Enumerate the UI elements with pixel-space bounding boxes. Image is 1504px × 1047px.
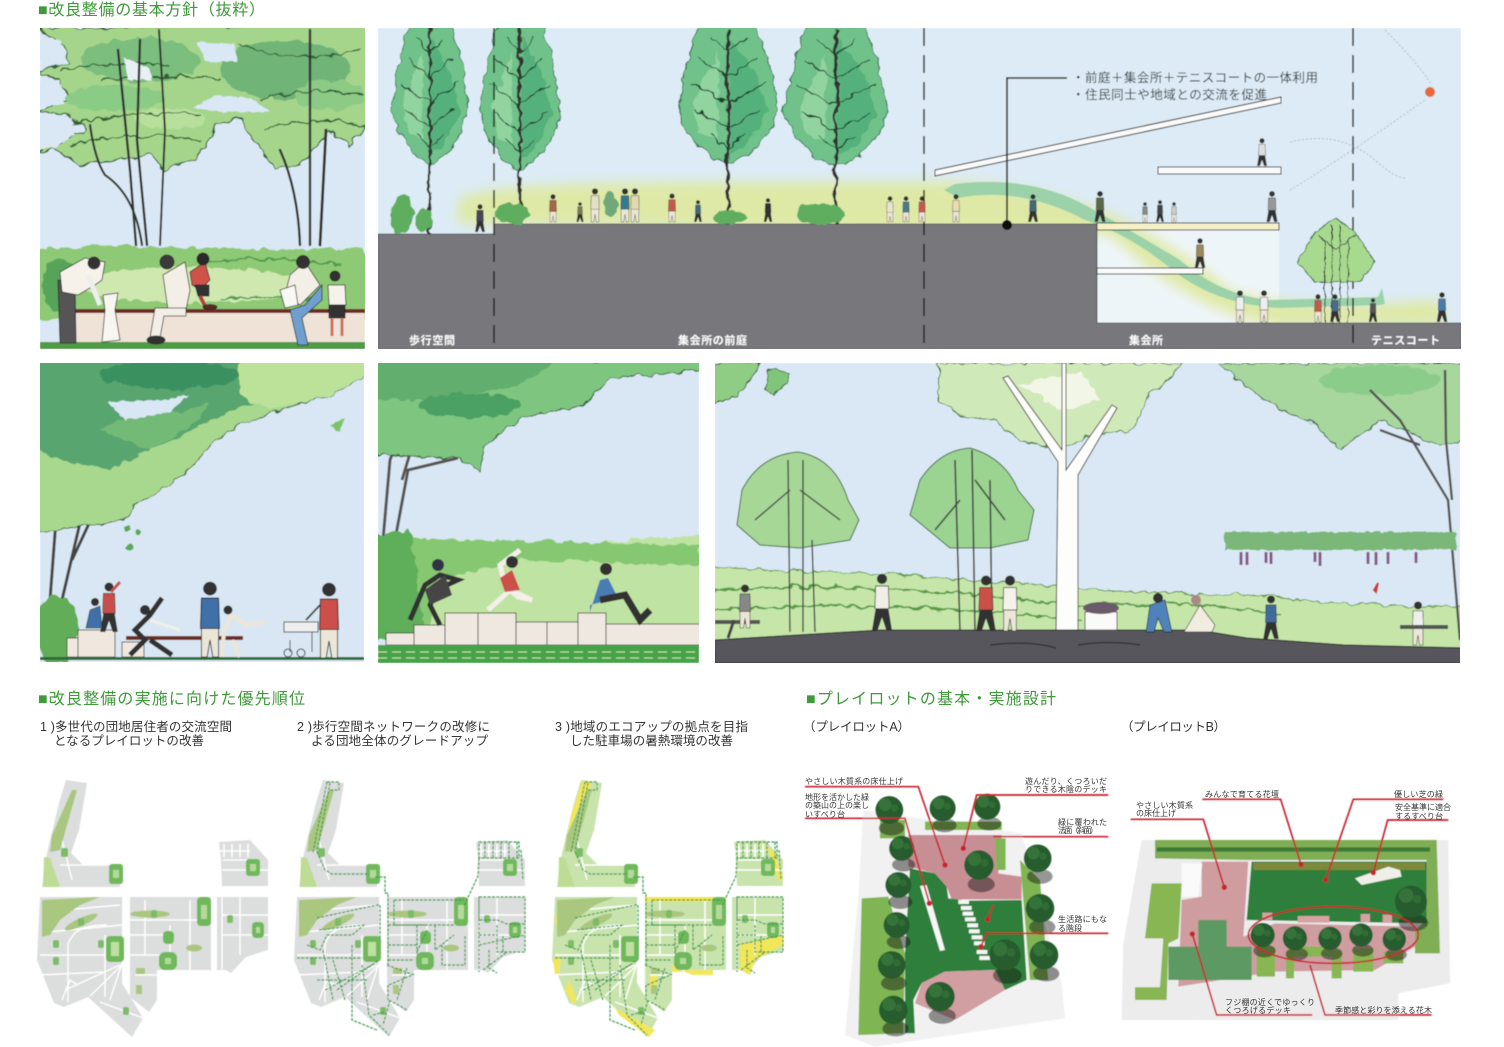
callout text [1072, 70, 1318, 102]
grass borders [858, 820, 1048, 1035]
model base [845, 810, 1065, 1047]
planter [1083, 602, 1119, 630]
heading: basic policy: ■改良整備の基本方針（抜粋） [38, 1, 265, 19]
upper foliage [711, 363, 1470, 450]
sun and light trajectory [1290, 30, 1435, 190]
zone labels: テニスコート [1371, 334, 1440, 347]
flower bed [1253, 863, 1425, 870]
zone labels [409, 333, 1440, 347]
stepping blocks [386, 613, 702, 645]
tree trunks [381, 454, 459, 537]
panel: picnic under tree sketch [35, 360, 370, 665]
panel: trees and bench sketch [36, 24, 370, 349]
foliage canopy [36, 24, 370, 170]
annotations: play lot B: 安全基準に適合 [1395, 802, 1451, 812]
large central trunk [1003, 363, 1117, 635]
annotations: play lot A [805, 776, 1107, 933]
zone labels: 歩行空間 [409, 333, 455, 347]
annotations: play lot A: いすべり台 [805, 809, 845, 819]
model base [1122, 840, 1450, 1020]
annotations: play lot B [1136, 789, 1451, 1015]
foliage canopy [374, 360, 705, 472]
priority text 1 [40, 720, 232, 748]
small tree at tennis court [1297, 218, 1375, 323]
green flow arrow [944, 182, 1385, 308]
annotations: play lot B: の床仕上げ [1136, 808, 1176, 818]
hedge [36, 245, 370, 320]
annotations: play lot A: やさしい木質系の床仕上げ [805, 776, 903, 786]
annotations: play lot A: 緑に覆われた [1058, 817, 1107, 827]
annotations: play lot A: 法面（斜面） [1058, 825, 1098, 835]
yellow-green activity glow [458, 182, 1445, 325]
annotations: play lot B: やさしい木質系 [1136, 800, 1193, 810]
annotations: play lot B: フジ棚の近くでゆっくり [1225, 997, 1315, 1007]
photo: play lot A model [805, 787, 1108, 1047]
label: play lot A: （プレイロットA） [803, 720, 910, 734]
flowering trees [1251, 886, 1428, 961]
sky gaps in canopy [36, 40, 270, 148]
priority text 3: した駐車場の暑熱環境の改善 [570, 733, 733, 748]
zone labels: 集会所の前庭 [678, 333, 747, 347]
priority text 1: となるプレイロットの改善 [54, 733, 204, 748]
annotations: play lot B: 季節感と彩りを添える花木 [1335, 1005, 1432, 1015]
ground section [378, 224, 1461, 349]
panel: cross-section of the meeting hall and forecourt [378, 21, 1461, 349]
people on the bench [58, 253, 346, 345]
hedge border [1155, 840, 1440, 953]
annotations: play lot B: くつろげるデッキ [1225, 1005, 1291, 1015]
slide [1355, 867, 1402, 885]
leader dots [927, 846, 990, 949]
leader dots [1190, 862, 1376, 937]
map 3: eco-up network [552, 780, 783, 1037]
wisteria pergola roof [1168, 920, 1252, 980]
shrub [40, 594, 80, 662]
root scribbles [990, 642, 1140, 648]
lawn [1247, 862, 1427, 923]
panel: children on stepping blocks sketch [374, 360, 705, 663]
side hedges [1135, 883, 1403, 1000]
annotations: play lot A: る階段 [1058, 923, 1082, 933]
map 2: walkway network [294, 780, 525, 1037]
panel: green path with people gardening sketch [710, 363, 1470, 663]
tree trunks [90, 30, 326, 245]
zone labels: 集会所 [1129, 333, 1163, 347]
lower pink plaza [915, 970, 1005, 1020]
hedge [374, 530, 705, 640]
building interior [1097, 228, 1279, 324]
label: play lot B: （プレイロットB） [1121, 720, 1226, 734]
priority text 1: 1 )多世代の団地居住者の交流空間 [40, 720, 232, 734]
annotations: play lot A: りできる木陰のデッキ [1025, 784, 1107, 794]
priority text 3: 3 )地域のエコアップの拠点を目指 [555, 719, 748, 734]
tree trunks [48, 524, 90, 600]
ground [715, 630, 1466, 663]
lawn [905, 868, 1027, 1033]
annotations: play lot B: みんなで育てる花壇 [1205, 789, 1279, 799]
slide and steps [920, 885, 945, 951]
callout text: ・前庭＋集会所＋テニスコートの一体利用 [1072, 70, 1318, 85]
trees [875, 794, 1059, 1036]
red ellipse and leader lines [1131, 799, 1448, 1015]
photo: play lot B model [1122, 799, 1450, 1020]
priority text 2: よる団地全体のグレードアップ [311, 734, 488, 748]
heading: play lot design: ■プレイロットの基本・実施設計 [806, 690, 1056, 708]
annotations: play lot A: の築山の上の楽し [805, 800, 869, 810]
priority text 2: 2 )歩行空間ネットワークの改修に [297, 719, 490, 734]
shrubs [391, 191, 844, 234]
grass [378, 645, 699, 663]
sky gap and stray leaves [108, 395, 345, 550]
red leader lines [805, 787, 1108, 947]
map 1: gray estate plan [37, 780, 268, 1037]
annotations: play lot B: するすべり台 [1395, 811, 1443, 821]
poplar trees [392, 21, 888, 249]
figures in the section [475, 138, 1447, 322]
figures in the scene [715, 574, 1448, 645]
benches [1262, 913, 1392, 923]
foliage canopy [36, 360, 370, 532]
right tree trunks [1370, 370, 1460, 640]
steps and table [40, 630, 364, 660]
annotations: play lot A: 地形を活かした緑 [805, 792, 869, 802]
callout leader with dot [1002, 78, 1067, 230]
heading: improvement priority: ■改良整備の実施に向けた優先順位 [38, 690, 305, 708]
hedge [710, 568, 1465, 650]
callout text: ・住民同士や地域との交流を促進 [1072, 88, 1267, 102]
wisteria pergola [1225, 532, 1456, 566]
picnic figures and grill [86, 582, 338, 658]
annotations: play lot A: 生活路にもな [1058, 914, 1107, 924]
pink paving [908, 835, 1022, 899]
priority text 3 [555, 719, 748, 748]
dashed zone dividers [494, 28, 1353, 349]
wall and bench [40, 309, 365, 349]
jumping children [410, 550, 650, 625]
annotations: play lot A: 遊んだり、くつろいだ [1025, 776, 1107, 786]
priority text 2 [297, 719, 490, 748]
building decks and roof [935, 97, 1281, 274]
annotations: play lot B: 優しい芝の緑 [1394, 789, 1443, 799]
round trees [737, 448, 1034, 632]
pink paving [1178, 862, 1415, 987]
